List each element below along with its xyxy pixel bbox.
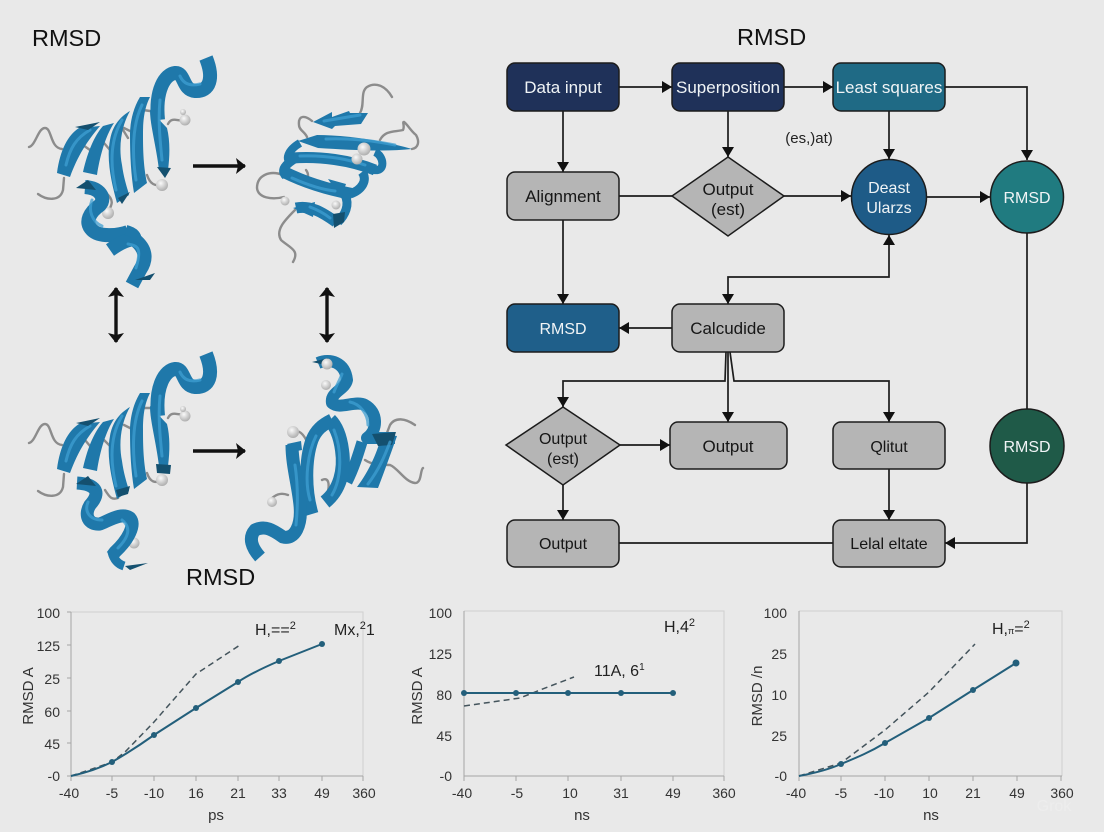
node: Alignment xyxy=(507,172,619,220)
annotation: H,== xyxy=(255,622,290,639)
node: Output (est) lower decision: Output xyxy=(539,431,588,448)
x axis labels: 10 xyxy=(922,785,938,801)
x axis labels: 360 xyxy=(1050,785,1074,801)
y axis labels: 100 xyxy=(764,605,787,621)
node: Deast Ularzs: Ularzs xyxy=(866,200,912,217)
protein ribbon: bottom left xyxy=(29,354,210,570)
node: RMSD teal circle xyxy=(990,161,1064,233)
y axis title: RMSD A xyxy=(20,667,37,725)
x axis labels: -10 xyxy=(144,785,164,801)
plot frame xyxy=(67,612,363,781)
x axis labels: 360 xyxy=(712,785,736,801)
annotation: Mx, xyxy=(334,622,360,639)
y axis labels: 25 xyxy=(771,728,787,744)
dashed series xyxy=(71,645,240,776)
node: Output (est) decision: Output xyxy=(702,180,754,199)
y axis labels: 10 xyxy=(771,687,787,703)
plot frame xyxy=(464,611,724,781)
x axis labels: -5 xyxy=(106,785,118,801)
y axis title: RMSD A xyxy=(409,667,426,725)
title: left RMSD: RMSD xyxy=(32,25,101,51)
y axis title: RMSD /n xyxy=(749,666,766,726)
node: RMSD blue box xyxy=(507,304,619,352)
line chart: ps xyxy=(20,605,376,824)
line chart: ns flat xyxy=(409,605,736,824)
node: Output (est) decision: (est) xyxy=(711,200,745,219)
y axis labels: 60 xyxy=(44,704,60,720)
y axis labels: 45 xyxy=(44,736,60,752)
y axis labels: -0 xyxy=(440,768,452,784)
node: RMSD blue box: RMSD xyxy=(539,321,587,338)
annotation: (es,)at): (es,)at) xyxy=(785,130,833,147)
dashed series xyxy=(464,677,574,706)
arrow: bottom right-pointing xyxy=(193,449,245,453)
node: Superposition xyxy=(672,63,784,111)
x axis labels: 31 xyxy=(613,785,629,801)
annotation: H,4 xyxy=(664,619,689,636)
title: right RMSD: RMSD xyxy=(737,24,806,50)
annotation: 2 xyxy=(360,620,366,632)
protein ribbon: bottom right xyxy=(251,358,423,557)
line chart: ns rising xyxy=(749,605,1074,824)
node: Output (est) lower decision: (est) xyxy=(547,451,579,468)
x axis labels: 21 xyxy=(965,785,981,801)
annotation: H,π= xyxy=(992,621,1024,638)
x axis labels: 21 xyxy=(230,785,246,801)
x axis title: ns xyxy=(923,807,939,824)
node: RMSD teal circle: RMSD xyxy=(1003,190,1051,207)
annotation: 1 xyxy=(639,662,645,673)
y axis labels: 100 xyxy=(429,605,452,621)
arrow: right vertical double xyxy=(325,288,329,342)
node: Output (est) lower decision xyxy=(506,407,620,485)
annotation: 11A, 6 xyxy=(594,663,639,680)
solid series xyxy=(71,641,325,776)
annotation: 2 xyxy=(1024,619,1030,631)
solid series xyxy=(799,660,1020,776)
x axis labels: -10 xyxy=(874,785,894,801)
node: RMSD green circle xyxy=(990,409,1064,483)
y axis labels: 80 xyxy=(436,687,452,703)
flowchart xyxy=(506,63,1064,567)
x axis labels xyxy=(452,785,736,801)
x axis labels: 16 xyxy=(188,785,204,801)
node: RMSD green circle: RMSD xyxy=(1003,439,1051,456)
node: Data input xyxy=(507,63,619,111)
x axis labels xyxy=(786,785,1074,801)
arrow: left vertical double xyxy=(114,288,118,342)
node: Lelal eltate xyxy=(833,520,945,567)
node: Calcudide xyxy=(672,304,784,352)
plot frame xyxy=(799,611,1062,781)
node: Lelal eltate: Lelal eltate xyxy=(850,536,928,553)
x axis labels: -5 xyxy=(835,785,847,801)
x axis labels: -40 xyxy=(786,785,806,801)
x axis labels xyxy=(59,785,376,801)
solid series xyxy=(461,690,676,696)
y axis labels xyxy=(429,605,452,784)
node: Qlitut xyxy=(833,422,945,469)
y axis labels: -0 xyxy=(775,768,787,784)
protein ribbon: top left xyxy=(29,58,210,285)
node: Deast Ularzs: Deast xyxy=(868,180,910,197)
node: Alignment: Alignment xyxy=(525,187,601,206)
x axis labels: 33 xyxy=(271,785,287,801)
node: Deast Ularzs xyxy=(852,160,926,234)
x axis labels: 10 xyxy=(562,785,578,801)
y axis labels: -0 xyxy=(48,768,60,784)
y axis labels: 25 xyxy=(771,646,787,662)
y axis labels xyxy=(764,605,787,784)
node: Least squares xyxy=(833,63,945,111)
y axis labels: 45 xyxy=(436,728,452,744)
y axis labels: 125 xyxy=(37,638,60,654)
x axis labels: -5 xyxy=(511,785,523,801)
annotation: 2 xyxy=(689,617,695,629)
arrow: top right-pointing xyxy=(193,164,245,168)
x axis labels: 360 xyxy=(352,785,376,801)
node: Output (est) decision xyxy=(672,157,784,236)
x axis title: ns xyxy=(574,807,590,824)
x axis labels: 49 xyxy=(665,785,681,801)
y axis labels: 25 xyxy=(44,671,60,687)
x axis labels: 49 xyxy=(314,785,330,801)
node: Qlitut: Qlitut xyxy=(870,439,908,456)
node: Least squares: Least squares xyxy=(836,78,942,97)
node: Output bottom: Output xyxy=(539,536,588,553)
x axis labels: 49 xyxy=(1009,785,1025,801)
y axis labels xyxy=(37,605,60,784)
node: Output bottom xyxy=(507,520,619,567)
y axis labels: 100 xyxy=(37,605,60,621)
dashed series xyxy=(799,644,975,776)
node: Superposition: Superposition xyxy=(676,78,780,97)
annotation: 1 xyxy=(366,622,375,639)
connector lines and arrows xyxy=(563,87,1027,543)
x axis title: ps xyxy=(208,807,224,824)
node: Calcudide: Calcudide xyxy=(690,319,766,338)
node: Data input: Data input xyxy=(524,78,602,97)
watermark: Grok xyxy=(1037,798,1072,815)
x axis labels: -40 xyxy=(59,785,79,801)
x axis labels: -40 xyxy=(452,785,472,801)
y axis labels: 125 xyxy=(429,646,452,662)
protein ribbon: top right xyxy=(257,85,418,262)
title: lower RMSD: RMSD xyxy=(186,564,255,590)
node: Output middle xyxy=(670,422,787,469)
annotation: 2 xyxy=(290,620,296,632)
node: Output middle: Output xyxy=(702,437,754,456)
